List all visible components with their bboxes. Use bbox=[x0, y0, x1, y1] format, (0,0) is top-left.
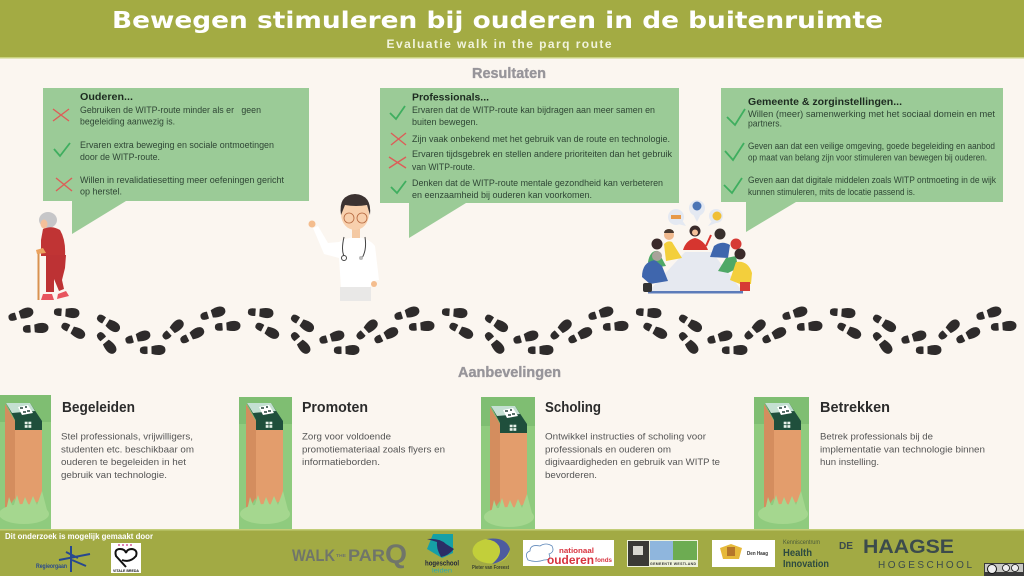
recommendation: Begeleiden bbox=[0, 395, 194, 530]
title: Bewegen stimuleren bij ouderen in de buitenruimte bbox=[112, 8, 883, 34]
body: professionals en ouderen om bbox=[545, 444, 671, 454]
body: Zorg voor voldoende bbox=[302, 431, 391, 441]
body bbox=[545, 431, 720, 480]
panel: Gemeente en zorginstellingen bbox=[721, 88, 1003, 232]
item 1: Willen (meer) samenwerking met het sociaal domein en met bbox=[748, 109, 996, 119]
tile bbox=[481, 397, 535, 530]
item 1: partners. bbox=[748, 118, 782, 128]
item 3: op herstel. bbox=[80, 186, 122, 196]
icon: creative commons licence bbox=[984, 563, 1024, 576]
sponsor note: Dit onderzoek is mogelijk gemaakt door bbox=[5, 532, 153, 541]
logo: Walk the ParQ: Q bbox=[385, 539, 407, 569]
speech bubble bbox=[380, 88, 679, 238]
body: studenten etc. beschikbaar om bbox=[61, 444, 194, 454]
item 1 bbox=[727, 109, 996, 128]
body: Ontwikkel instructies of scholing voor bbox=[545, 431, 706, 441]
tile bbox=[239, 397, 292, 530]
heading: Ouderen... bbox=[80, 91, 133, 103]
tile bbox=[0, 395, 51, 530]
logo: De Haagse Hogeschool: HOGESCHOOL bbox=[878, 560, 972, 571]
item 1 bbox=[53, 105, 261, 126]
logo: De Haagse Hogeschool: DE bbox=[839, 541, 853, 552]
panel: Professionals bbox=[380, 88, 679, 238]
heading: Betrekken bbox=[820, 399, 890, 416]
icon: older woman with cane bbox=[36, 212, 69, 300]
item 1: begeleiding aanwezig is. bbox=[80, 116, 175, 126]
body: hun instelling. bbox=[820, 457, 879, 467]
heading: Promoten bbox=[302, 399, 368, 416]
logo: Hogeschool Leiden: leiden bbox=[432, 568, 452, 574]
speech bubble bbox=[721, 88, 1003, 232]
logo: Pieter van Foreest bbox=[472, 538, 510, 571]
logo: Nationaal Ouderenfonds: fonds bbox=[595, 557, 612, 564]
logo: Kenniscentrum Health Innovation: Kenniscentrum bbox=[783, 540, 820, 546]
panel: Ouderen bbox=[43, 88, 309, 234]
logo: Walk the ParQ bbox=[292, 539, 407, 569]
heading: Scholing bbox=[545, 399, 601, 416]
icon: doctor bbox=[308, 194, 379, 301]
body bbox=[61, 431, 194, 480]
logo: Walk the ParQ: WALK bbox=[292, 546, 336, 565]
heading: Begeleiden bbox=[62, 399, 135, 416]
item 3: Geven aan dat digitale middelen zoals WITP ontmoeting in de wijk bbox=[748, 175, 996, 185]
body: promotiemateriaal zoals flyers en bbox=[302, 444, 445, 454]
body: implementatie van technologie binnen bbox=[820, 444, 985, 454]
item 4: en eenzaamheid bij ouderen kan voorkomen. bbox=[412, 190, 592, 200]
subtitle: Evaluatie walk in the parq route bbox=[386, 37, 612, 51]
heading: Gemeente & zorginstellingen... bbox=[748, 96, 902, 108]
item 2: Geven aan dat een veilige omgeving, goede begeleiding en aanbod bbox=[748, 141, 995, 151]
item 3 bbox=[56, 175, 284, 196]
item 2: op maat van belang zijn voor stimuleren van bewegen bij ouderen. bbox=[748, 152, 987, 162]
recommendation: Betrekken bbox=[754, 397, 985, 530]
speech bubble bbox=[43, 88, 309, 234]
body: ouderen te begeleiden in het bbox=[61, 457, 186, 467]
logo: Kenniscentrum Health Innovation: Innovation bbox=[783, 559, 829, 570]
logo: Walk the ParQ: THE bbox=[336, 553, 346, 558]
logo: Den Haag bbox=[712, 540, 775, 567]
item 2: Ervaren extra beweging en sociale ontmoetingen bbox=[80, 140, 274, 150]
item 1 bbox=[390, 105, 655, 127]
logo: Hogeschool Leiden: hogeschool bbox=[425, 560, 459, 568]
body bbox=[820, 431, 985, 467]
item 3: Ervaren tijdsgebrek en stellen andere prioriteiten dan het gebruik bbox=[412, 149, 672, 159]
tile bbox=[754, 397, 809, 530]
item 4 bbox=[391, 178, 663, 200]
logo: Gemeente Westland bbox=[627, 540, 698, 567]
item 3: van WITP-route. bbox=[412, 162, 475, 172]
logo: Vitale: VITALE BREDA bbox=[113, 569, 139, 573]
logo: De Haagse Hogeschool bbox=[839, 537, 972, 571]
logo: De Haagse Hogeschool: HAAGSE bbox=[863, 537, 954, 558]
footer band bbox=[0, 529, 1024, 576]
logo: Regieorgaan: Regieorgaan bbox=[36, 563, 67, 570]
item 3: kunnen stimuleren, mits de locatie passend is. bbox=[748, 187, 915, 197]
item 3: Willen in revalidatiesetting meer oefeningen gericht bbox=[80, 175, 284, 185]
logo: Nationaal Ouderenfonds: nationaal bbox=[559, 546, 594, 555]
logo: Kenniscentrum Health Innovation: Health bbox=[783, 548, 812, 559]
logo: Kenniscentrum Health Innovation bbox=[783, 540, 829, 570]
recommendation: Scholing bbox=[481, 397, 720, 530]
logo: Vitale bbox=[111, 543, 141, 573]
item 3 bbox=[389, 149, 672, 172]
item 4: Denken dat de WITP-route mentale gezondheid kan verbeteren bbox=[412, 178, 663, 188]
body: Stel professionals, vrijwilligers, bbox=[61, 431, 193, 441]
item 1: Gebruiken de WITP-route minder als er geen bbox=[80, 105, 261, 115]
item 1: buiten bewegen. bbox=[412, 117, 478, 127]
item 2: Zijn vaak onbekend met het gebruik van de route en technologie. bbox=[412, 134, 670, 144]
logo: Gemeente Westland: GEMEENTE WESTLAND bbox=[650, 562, 696, 566]
logo: Pieter van Foreest: Pieter van Foreest bbox=[472, 565, 509, 571]
recommendation: Promoten bbox=[239, 397, 445, 530]
item 1: Ervaren dat de WITP-route kan bijdragen aan meer samen en bbox=[412, 105, 655, 115]
section heading: Resultaten: Resultaten bbox=[472, 66, 546, 82]
footprints trail bbox=[7, 305, 1017, 356]
logo: Nationaal Ouderenfonds: ouderen bbox=[547, 555, 594, 567]
logo: Den Haag: Den Haag bbox=[747, 551, 768, 557]
body: Betrek professionals bij de bbox=[820, 431, 933, 441]
item 2: door de WITP-route. bbox=[80, 152, 160, 162]
item 2 bbox=[54, 140, 274, 162]
logo: Walk the ParQ: PAR bbox=[348, 546, 385, 565]
section heading: Aanbevelingen: Aanbevelingen bbox=[458, 365, 561, 381]
logo: Regieorgaan bbox=[36, 546, 90, 572]
heading: Professionals... bbox=[412, 92, 489, 104]
body: informatieborden. bbox=[302, 457, 380, 467]
logo: Nationaal Ouderenfonds bbox=[523, 540, 614, 567]
item 2 bbox=[725, 141, 995, 162]
header band bbox=[0, 0, 1024, 58]
body: digivaardigheden en gebruik van WITP te bbox=[545, 457, 720, 467]
body bbox=[302, 431, 445, 467]
item 3 bbox=[724, 175, 996, 197]
logo: Hogeschool Leiden bbox=[425, 534, 459, 574]
body: gebruik van technologie. bbox=[61, 470, 167, 480]
body: bevorderen. bbox=[545, 470, 597, 480]
icon: meeting around a table bbox=[642, 200, 752, 294]
